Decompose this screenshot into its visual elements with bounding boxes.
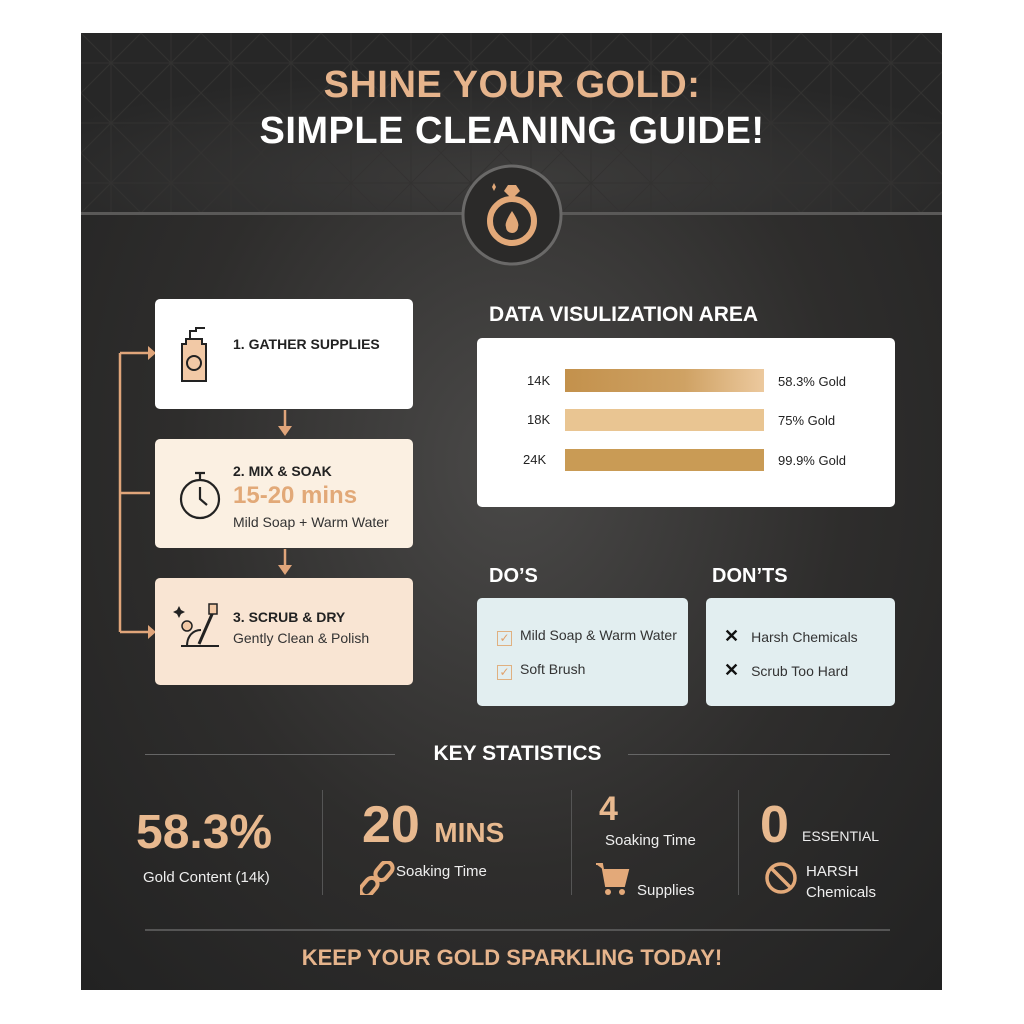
don'ts box (706, 598, 895, 706)
stat: supplies: Supplies (637, 882, 695, 899)
step 2: 15-20 mins (233, 482, 357, 509)
arrow (278, 410, 292, 436)
title: SIMPLE CLEANING GUIDE! (259, 110, 765, 152)
bar chart: 18K (527, 412, 550, 427)
bottom divider (145, 929, 890, 931)
step 1: 1. GATHER SUPPLIES (233, 336, 380, 352)
background panel (81, 33, 942, 990)
step 2 (155, 439, 413, 548)
title (259, 64, 765, 152)
bar chart (477, 338, 895, 507)
step 2: 2. MIX & SOAK (233, 463, 332, 479)
stat: gold content (136, 806, 272, 886)
icon: prohibited (765, 862, 797, 894)
do's box (477, 598, 688, 706)
don'ts box: ✕ Harsh Chemicals (724, 626, 858, 646)
stat: gold content: Gold Content (14k) (143, 869, 270, 886)
do's heading: DO’S (489, 565, 538, 587)
icon: ring with drop (462, 164, 562, 266)
arrow (278, 549, 292, 575)
bar chart: 99.9% Gold (778, 453, 846, 468)
key statistics heading: KEY STATISTICS (433, 742, 602, 765)
bar chart: 58.3% Gold (778, 374, 846, 389)
do's box: ✓ (499, 631, 510, 645)
stat: zero harsh chemicals: 0 (760, 796, 789, 854)
stat: supplies: 4 (599, 790, 618, 828)
don'ts box: ✕ Scrub Too Hard (724, 660, 848, 680)
stat: soaking time: 20 MINS (362, 796, 504, 854)
bar chart: 14K (527, 373, 550, 388)
header pattern (81, 33, 942, 215)
step 3: 3. SCRUB & DRY (233, 609, 345, 625)
stat: soaking time: Soaking Time (396, 863, 487, 880)
icon: link (360, 861, 395, 895)
step 2: Mild Soap + Warm Water (233, 514, 389, 530)
stat: gold content: 58.3% (136, 806, 272, 859)
stat: supplies: Soaking Time (605, 832, 696, 849)
footer call to action: KEEP YOUR GOLD SPARKLING TODAY! (302, 945, 722, 970)
do's box: Mild Soap & Warm Water (520, 627, 677, 643)
dividers (322, 790, 323, 895)
icon: timer (180, 472, 220, 520)
step 3: Gently Clean & Polish (233, 630, 369, 646)
flow bracket (118, 346, 155, 639)
bar chart: 24K (523, 452, 546, 467)
stat: zero harsh chemicals: ESSENTIAL (802, 828, 879, 844)
don'ts heading: DON’TS (712, 565, 788, 587)
stat: zero harsh chemicals: Chemicals (806, 884, 876, 901)
icon: brush (173, 603, 219, 647)
step 3 (155, 578, 413, 685)
stat: zero harsh chemicals (760, 796, 879, 901)
do's box: Soft Brush (520, 661, 585, 677)
icon: soap bottle (181, 327, 207, 382)
bar chart: 75% Gold (778, 413, 835, 428)
stat: zero harsh chemicals: HARSH (806, 863, 859, 880)
title: SHINE YOUR GOLD: (324, 64, 700, 106)
stat: supplies (596, 790, 696, 899)
stat: soaking time (360, 796, 504, 895)
icon: cart (596, 863, 630, 895)
chart heading: DATA VISULIZATION AREA (489, 303, 758, 326)
step 1 (155, 299, 413, 409)
do's box: ✓ (499, 665, 510, 679)
